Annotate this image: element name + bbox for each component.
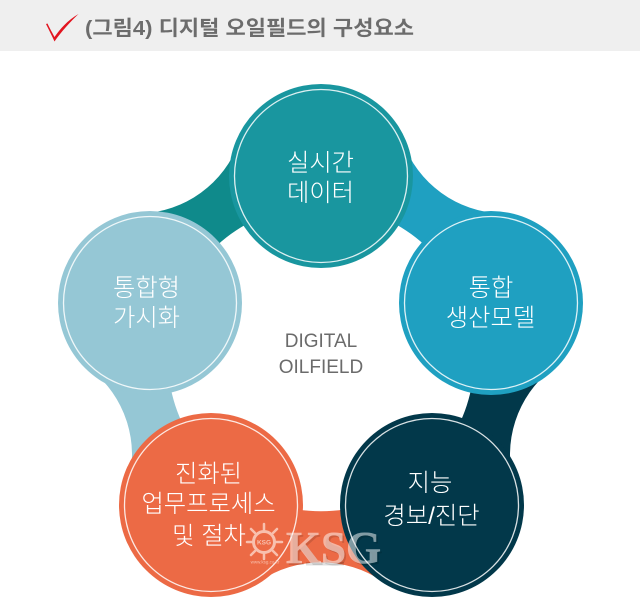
connector: light blue, lower left [75,292,237,532]
center label [279,331,363,378]
watermark smudge [306,562,344,566]
node: evolved work process and procedure: 및 절차 [172,523,246,550]
watermark: KSG [247,522,383,575]
node: real-time data: 실시간 [287,150,354,177]
title bar [0,0,640,51]
icon: red check mark [46,14,78,42]
center label: DIGITAL [285,331,357,352]
node: intelligent alarm and diagnosis: 지능 [408,470,452,497]
node: intelligent alarm and diagnosis [340,413,524,597]
node: real-time data: 데이터 [287,180,354,207]
center label: OILFIELD [279,357,363,378]
node: intelligent alarm and diagnosis: 경보/진단 [383,503,480,530]
node: integrated production model: 통합 [469,275,513,302]
node: evolved work process and procedure: 업무프로세스 [141,491,276,518]
connector: orange, bottom [211,482,432,581]
node: integrated visualization: 통합형 [113,275,180,302]
icon: ship wheel [247,524,282,564]
node: real-time data [229,84,413,268]
node: integrated production model: 생산모델 [446,305,535,332]
node: evolved work process and procedure [119,413,303,597]
diagram: digital oilfield cycle [58,84,583,597]
watermark shadow: KSG [288,524,383,575]
node: integrated visualization: 가시화 [113,305,180,332]
connector: blue, upper right [304,112,541,322]
title: (그림4) 디지털 오일필드의 구성요소 [85,17,414,40]
connector: dark teal, upper left [100,113,337,323]
icon: ship wheel: KSG [257,540,271,546]
node: evolved work process and procedure: 진화된 [175,461,242,488]
connector: navy, lower right [405,291,567,532]
icon: ship wheel: www.ksg.co.kr [251,560,280,564]
node: integrated visualization [58,211,242,395]
watermark text: KSG [286,522,381,573]
node: integrated production model [399,211,583,395]
